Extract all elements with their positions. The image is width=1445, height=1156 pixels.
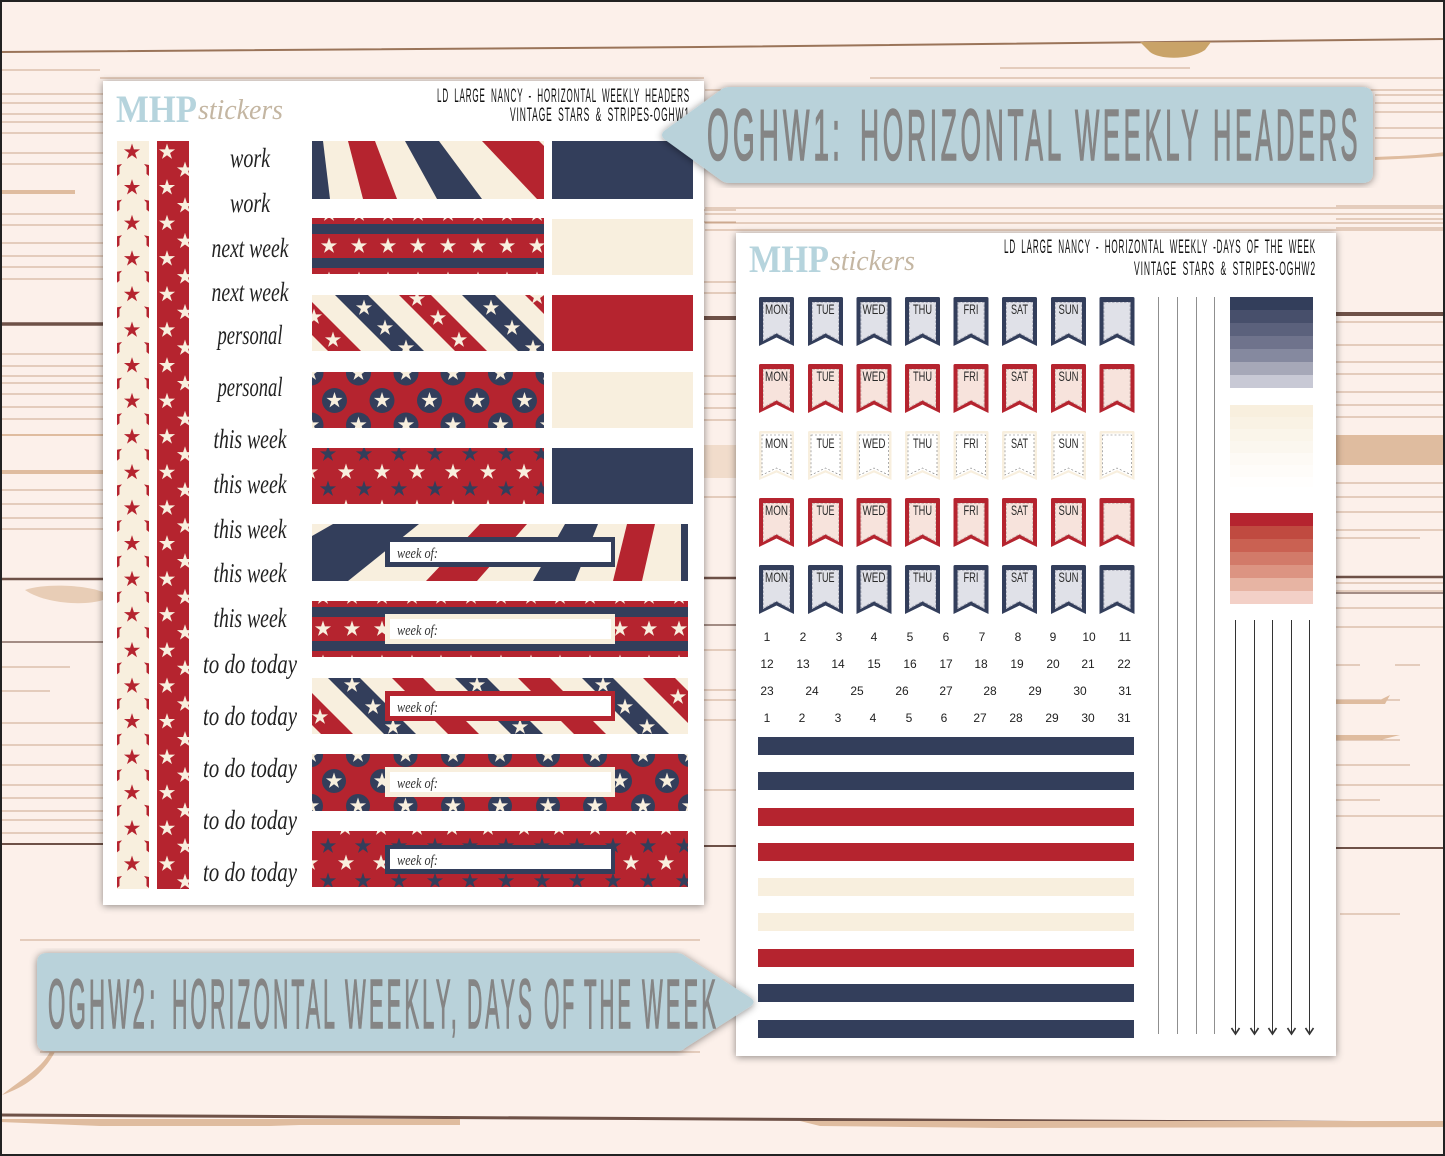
red gradient swatch: [1230, 513, 1313, 604]
date numbers: 6: [941, 711, 948, 725]
day flags row 3 cream: FRI: [964, 435, 978, 451]
script word stickers: to do today: [203, 753, 297, 783]
date numbers: 9: [1050, 630, 1057, 644]
day flags row 5 navy: [759, 565, 1134, 614]
date numbers: 28: [983, 684, 997, 698]
callout: OGHW2: :: [149, 965, 159, 1043]
header banner: vintage rays: [312, 141, 544, 199]
date numbers: 4: [871, 630, 878, 644]
sheet title: [1004, 237, 1316, 280]
logo: MHP stickers: stickers: [198, 94, 283, 126]
day flags row 3 cream: WED: [862, 435, 886, 451]
day flags row 3 cream: [759, 431, 1134, 480]
script word stickers: this week: [214, 558, 287, 588]
script word stickers: to do today: [203, 857, 297, 887]
callout: OGHW2: THE: [584, 965, 634, 1043]
day flags row 2 red: WED: [862, 368, 886, 384]
horizontal colour stripes: [758, 737, 1134, 1038]
day flags row 5 navy: SAT: [1011, 569, 1028, 585]
date numbers: 16: [903, 657, 917, 671]
panel: sheet OGHW2 horizontal weekly days of the week: [736, 233, 1336, 1056]
date numbers: 31: [1118, 684, 1132, 698]
date numbers: 3: [836, 630, 843, 644]
script word stickers: work: [230, 188, 271, 218]
week-of banner: scattered stars: week of:: [397, 853, 438, 869]
vertical rule lines: [1158, 297, 1214, 1034]
day flags row 1 navy: SUN: [1058, 301, 1078, 317]
day flags row 5 navy: MON: [765, 569, 788, 585]
callout: OGHW2: OGHW2: [48, 965, 148, 1043]
week-of banner: starred circles: [312, 754, 688, 811]
date numbers: 15: [867, 657, 881, 671]
day flags row 3 cream: MON: [765, 435, 788, 451]
header banner: scattered stars: [312, 448, 544, 504]
day flags row 3 cream: SUN: [1058, 435, 1078, 451]
date numbers: 26: [895, 684, 909, 698]
callout: OGHW1: OGHW1: [707, 96, 833, 176]
date numbers: 27: [973, 711, 987, 725]
callout: OGHW2: DAYS: [467, 965, 535, 1043]
week-of banner: vintage rays: week of:: [397, 546, 438, 562]
date numbers: 1: [764, 630, 771, 644]
day flags row 1 navy: WED: [862, 301, 886, 317]
day flags row 1 navy: FRI: [964, 301, 978, 317]
script word stickers: next week: [212, 277, 289, 307]
date numbers: 30: [1081, 711, 1095, 725]
sheet title: [437, 86, 690, 126]
date numbers: 8: [1015, 630, 1022, 644]
text: WEEK: [642, 965, 719, 1043]
script word stickers: this week: [214, 514, 287, 544]
date numbers: 7: [979, 630, 986, 644]
date numbers: 17: [939, 657, 953, 671]
day flags row 5 navy: THU: [913, 569, 932, 585]
date numbers: 2: [800, 630, 807, 644]
day flags row 2 red: FRI: [964, 368, 978, 384]
date numbers: 14: [831, 657, 845, 671]
day flags row 4 red: SUN: [1058, 502, 1078, 518]
date numbers: 5: [906, 711, 913, 725]
cream star strip: [117, 141, 149, 889]
cream gradient swatch: [1230, 405, 1313, 487]
week-of banner: stars and bars: [312, 601, 688, 657]
logo: MHP stickers: MHP: [116, 88, 197, 131]
date numbers: 19: [1010, 657, 1024, 671]
date numbers: 20: [1046, 657, 1060, 671]
script word stickers: to do today: [203, 805, 297, 835]
panel: sheet OGHW1 horizontal weekly headers: [103, 81, 731, 905]
date numbers: 29: [1028, 684, 1042, 698]
header banner: stars and bars: [312, 218, 544, 274]
script word stickers: [203, 143, 297, 887]
logo: MHP stickers: stickers: [830, 245, 915, 277]
date numbers: 30: [1073, 684, 1087, 698]
day flags row 1 navy: [759, 297, 1134, 346]
callout: OGHW1: WEEKLY: [1075, 96, 1202, 176]
day flags row 3 cream: SAT: [1011, 435, 1028, 451]
callout: OGHW1: [662, 87, 1373, 183]
script word stickers: to do today: [203, 649, 297, 679]
day flags row 4 red: THU: [913, 502, 932, 518]
callout: OGHW2: [37, 953, 754, 1051]
date numbers: 6: [943, 630, 950, 644]
day flags row 1 navy: THU: [913, 301, 932, 317]
week-of banner: vintage rays: [312, 524, 688, 581]
day flags row 3 cream: TUE: [816, 435, 834, 451]
text: LD LARGE NANCY - HORIZONTAL WEEKLY HEADERS: [437, 86, 690, 107]
date numbers: 1: [764, 711, 771, 725]
callout: OGHW1: HORIZONTAL: [860, 96, 1065, 176]
date numbers: 18: [974, 657, 988, 671]
date numbers: 3: [835, 711, 842, 725]
script word stickers: to do today: [203, 701, 297, 731]
day flags row 4 red: MON: [765, 502, 788, 518]
date numbers: 2: [799, 711, 806, 725]
header banner: starred circles: [312, 372, 544, 428]
header banner: diagonal starred stripes: [312, 295, 544, 351]
panel: sheet OGHW1 horizontal weekly headers: VINTAGE STARS & STRIPES-OGHW1: [510, 105, 690, 126]
date numbers: 4: [870, 711, 877, 725]
date numbers: 23: [760, 684, 774, 698]
script word stickers: personal: [216, 372, 282, 402]
day flags row 2 red: TUE: [816, 368, 834, 384]
day flags row 1 navy: MON: [765, 301, 788, 317]
logo: MHP stickers: MHP: [749, 238, 829, 281]
date numbers: 22: [1117, 657, 1131, 671]
script word stickers: this week: [214, 603, 287, 633]
script word stickers: this week: [214, 424, 287, 454]
day flags row 4 red: FRI: [964, 502, 978, 518]
day flags row 1 navy: SAT: [1011, 301, 1028, 317]
day flags row 3 cream: THU: [913, 435, 932, 451]
day flags row 2 red: [759, 364, 1134, 413]
day flags row 1 navy: TUE: [816, 301, 834, 317]
day flags row 2 red: SAT: [1011, 368, 1028, 384]
script word stickers: work: [230, 143, 271, 173]
date numbers: 12: [760, 657, 774, 671]
arrow lines: [1232, 620, 1314, 1034]
week-of banner: starred circles: week of:: [397, 776, 438, 792]
date numbers: [760, 630, 1132, 725]
week-of banner: diagonal starred stripes: [312, 678, 688, 734]
day flags row 5 navy: WED: [862, 569, 886, 585]
date numbers: 31: [1117, 711, 1131, 725]
date numbers: 21: [1081, 657, 1095, 671]
week-of banner: stars and bars: week of:: [397, 623, 438, 639]
day flags row 5 navy: TUE: [816, 569, 834, 585]
day flags row 4 red: TUE: [816, 502, 834, 518]
date numbers: 11: [1119, 630, 1132, 644]
date numbers: 10: [1082, 630, 1096, 644]
day flags row 2 red: MON: [765, 368, 788, 384]
callout: OGHW1: :: [832, 96, 844, 176]
script word stickers: this week: [214, 469, 287, 499]
callout: OGHW2: HORIZONTAL: [172, 965, 338, 1043]
navy gradient swatch: [1230, 297, 1313, 388]
day flags row 4 red: WED: [862, 502, 886, 518]
week-of banner: diagonal starred stripes: week of:: [397, 700, 438, 716]
date numbers: 27: [939, 684, 953, 698]
solid colour header blocks: [552, 141, 693, 504]
script word stickers: personal: [216, 320, 282, 350]
date numbers: 5: [907, 630, 914, 644]
date numbers: 13: [796, 657, 810, 671]
week-of banner: scattered stars: [312, 831, 688, 887]
date numbers: 29: [1045, 711, 1059, 725]
callout: OGHW2: WEEKLY,: [345, 965, 460, 1043]
logo: MHP stickers: [749, 238, 915, 281]
script word stickers: next week: [212, 233, 289, 263]
day flags row 4 red: SAT: [1011, 502, 1028, 518]
day flags row 5 navy: FRI: [964, 569, 978, 585]
day flags row 2 red: THU: [913, 368, 932, 384]
date numbers: 25: [850, 684, 864, 698]
day flags row 2 red: SUN: [1058, 368, 1078, 384]
callout: OGHW2: OF: [544, 965, 577, 1043]
day flags row 5 navy: SUN: [1058, 569, 1078, 585]
day flags row 4 red: [759, 498, 1134, 547]
logo: MHP stickers: [116, 88, 283, 131]
date numbers: 28: [1009, 711, 1023, 725]
date numbers: 24: [805, 684, 819, 698]
red star strip: [157, 141, 189, 889]
